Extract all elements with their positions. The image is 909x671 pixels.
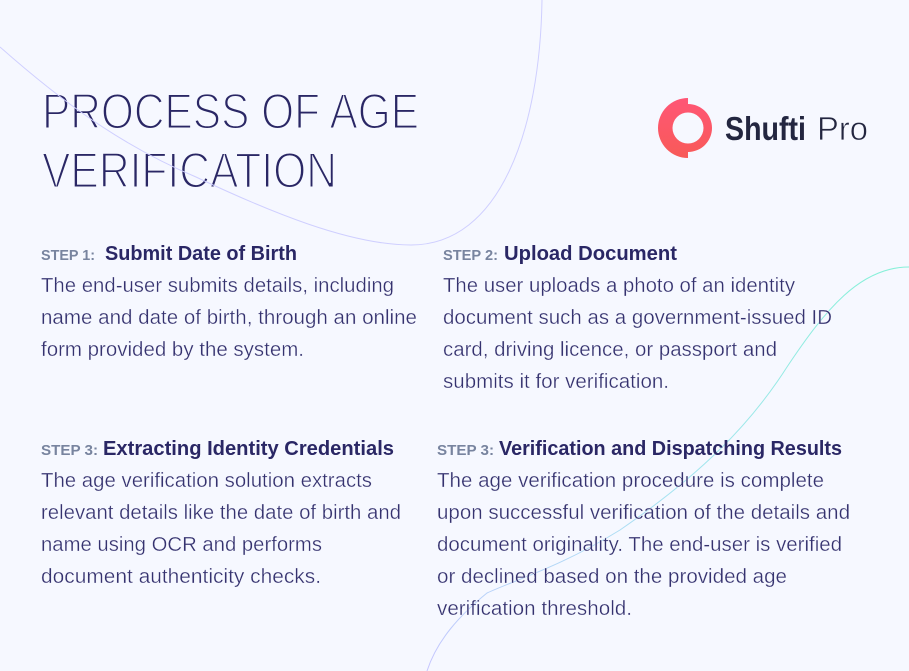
- decorative teal curve: [427, 267, 909, 671]
- step 2 text: The user uploads a photo of an identity: [443, 275, 795, 297]
- decorative purple curve: [0, 0, 542, 245]
- verification heading: STEP 3:: [437, 442, 494, 459]
- step 3 text: The age verification solution extracts: [41, 470, 372, 492]
- step 1 heading: STEP 1:: [41, 247, 95, 264]
- step 2 heading: Upload Document: [504, 243, 677, 265]
- logo wordmark: Pro: [817, 110, 868, 147]
- title: VERIFICATION: [42, 142, 337, 198]
- panel: step 1: [41, 243, 417, 361]
- logo: Shufti Pro: [658, 98, 868, 158]
- logo wordmark: Shufti: [725, 110, 806, 147]
- verification heading: Verification and Dispatching Results: [499, 438, 842, 460]
- title: [42, 84, 419, 198]
- verification text: verification threshold.: [437, 598, 632, 620]
- panel: step 2: [443, 243, 832, 393]
- step 1 text: [41, 275, 417, 361]
- step 2 text: [443, 275, 832, 393]
- panel: step 3 verification: [437, 438, 850, 620]
- step 2 text: card, driving licence, or passport and: [443, 339, 777, 361]
- verification text: The age verification procedure is complete: [437, 470, 824, 492]
- step 3 text: relevant details like the date of birth and: [41, 502, 401, 524]
- verification text: document originality. The end-user is verified: [437, 534, 842, 556]
- verification text: [437, 470, 850, 620]
- step 3 heading: STEP 3:: [41, 442, 98, 459]
- title: PROCESS OF AGE: [42, 84, 419, 140]
- step 2 text: submits it for verification.: [443, 371, 669, 393]
- step 3 text: [41, 470, 401, 588]
- panel: step 3 extracting: [41, 438, 401, 588]
- step 1 text: The end-user submits details, including: [41, 275, 394, 297]
- verification text: or declined based on the provided age: [437, 566, 787, 588]
- step 1 heading: Submit Date of Birth: [105, 243, 297, 265]
- step 3 text: document authenticity checks.: [41, 566, 321, 588]
- icon: logo ring: [658, 98, 712, 158]
- step 3 text: name using OCR and performs: [41, 534, 322, 556]
- verification text: upon successful verification of the details and: [437, 502, 850, 524]
- step 2 text: document such as a government-issued ID: [443, 307, 832, 329]
- step 3 heading: Extracting Identity Credentials: [103, 438, 394, 460]
- step 1 text: name and date of birth, through an online: [41, 307, 417, 329]
- step 1 text: form provided by the system.: [41, 339, 304, 361]
- step 2 heading: STEP 2:: [443, 247, 498, 264]
